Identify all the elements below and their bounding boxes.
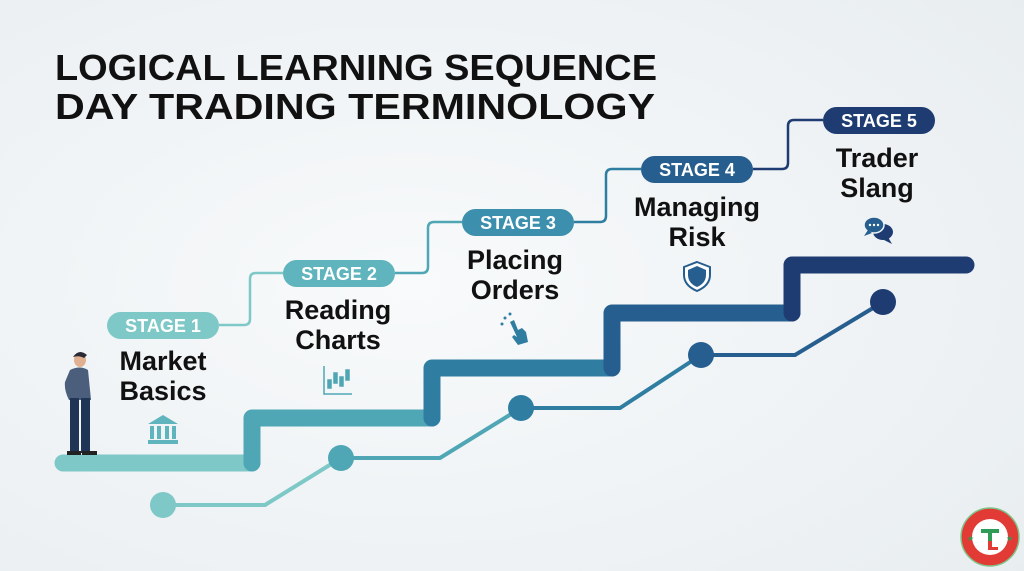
stage 5: Trader: [836, 143, 919, 173]
stage 3: STAGE 3: [480, 213, 556, 233]
stage 2: Charts: [295, 325, 381, 355]
stage 5: Slang: [840, 173, 914, 203]
stage 4: STAGE 4: [659, 160, 735, 180]
stage 4: Managing: [634, 192, 760, 222]
title: DAY TRADING TERMINOLOGY: [55, 86, 655, 127]
icon: bank: [148, 415, 178, 444]
logo: ★: [1006, 534, 1013, 543]
stage 1: Basics: [119, 376, 207, 406]
stage 3: Orders: [471, 275, 559, 305]
logo: ★: [967, 534, 974, 543]
title: [55, 47, 657, 127]
stage 5: STAGE 5: [841, 111, 917, 131]
stage 1: [107, 312, 219, 406]
stage 2: Reading: [285, 295, 391, 325]
icon: chat bubbles: [864, 217, 893, 244]
progress line with nodes: [150, 289, 896, 518]
stage 2: STAGE 2: [301, 264, 377, 284]
stage 1: Market: [119, 346, 207, 376]
stage 4: Risk: [668, 222, 726, 252]
stage 5: [823, 107, 935, 203]
title: LOGICAL LEARNING SEQUENCE: [55, 47, 657, 88]
stage 3: Placing: [467, 245, 563, 275]
logo: [961, 508, 1019, 566]
icon: candlestick chart: [324, 366, 352, 394]
staircase: [63, 265, 966, 463]
connectors between badges: [219, 120, 823, 325]
stage 3: [462, 209, 574, 305]
icon: pointer click: [500, 312, 528, 345]
person: [65, 352, 97, 455]
stage 1: STAGE 1: [125, 316, 201, 336]
stage 2: [283, 260, 395, 355]
stage 4: [634, 156, 760, 252]
icon: shield: [684, 262, 710, 291]
